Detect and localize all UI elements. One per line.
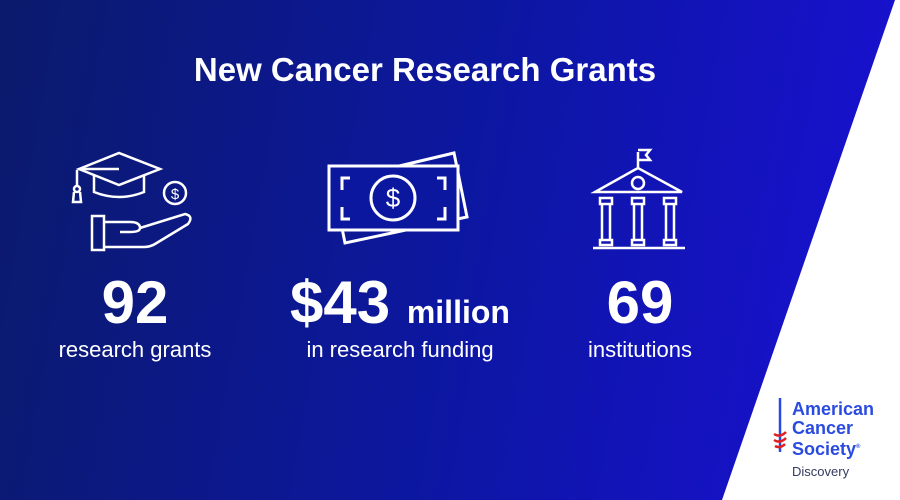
logo: Discovery [792,464,849,479]
text: institutions [588,337,692,362]
text: in research funding [306,337,494,362]
icon: institution [590,148,685,250]
icon: cap and hand [72,152,192,252]
icon: money [328,151,469,245]
text: research grants [59,337,211,362]
title: New Cancer Research Grants [194,51,656,88]
stat: 69: 69 [607,269,673,336]
stat: 92: 92 [102,269,168,336]
icon: cap and hand: $ [171,186,180,203]
logo: Society® [792,439,860,459]
stat: 43 million: $43 million [290,269,510,336]
logo [773,398,874,479]
logo: American [792,399,874,419]
icon: money: $ [386,183,401,213]
logo: Cancer [792,418,853,438]
